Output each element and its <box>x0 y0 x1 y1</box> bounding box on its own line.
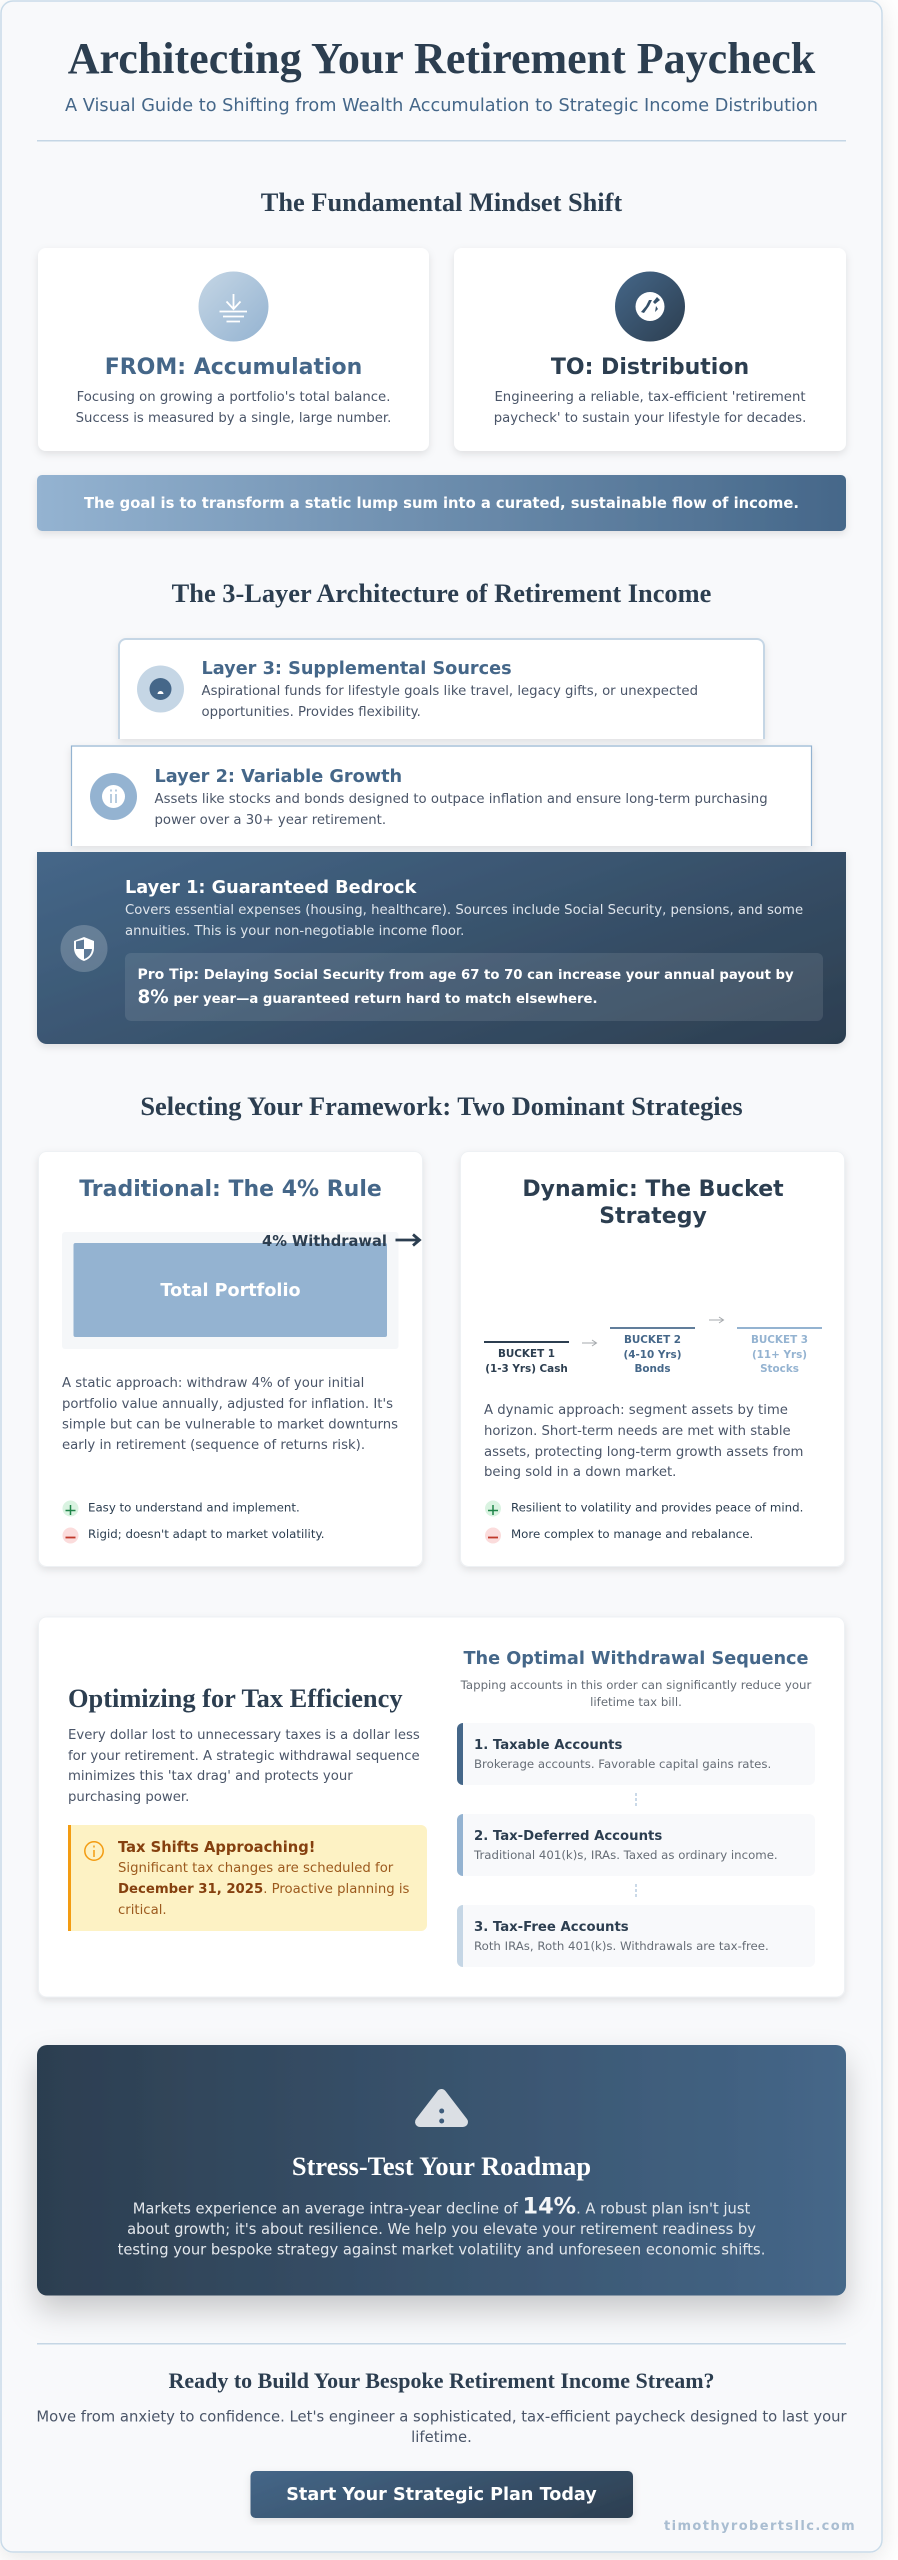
chart: total portfolio <box>62 1232 420 1349</box>
callout: tax shifts: Significant tax changes are scheduled for <box>118 1861 394 1876</box>
watermark: timothyrobertsllc.com <box>664 2519 856 2534</box>
description <box>202 684 698 720</box>
description: Assets like stocks and bonds designed to outpace inflation and ensure long-term purchasing <box>154 792 768 807</box>
heading <box>522 1177 784 1229</box>
sequence intro: Tapping accounts in this order can significantly reduce your <box>460 1678 811 1692</box>
step 1: 1. Taxable Accounts <box>474 1738 623 1753</box>
title: Architecting Your Retirement Paycheck <box>68 34 816 83</box>
step 2: 2. Tax-Deferred Accounts <box>474 1829 662 1844</box>
step 1: Brokerage accounts. Favorable capital gains rates. <box>474 1757 771 1771</box>
description: Every dollar lost to unnecessary taxes is a dollar less <box>68 1728 420 1743</box>
withdrawal label: 4% Withdrawal <box>262 1233 387 1250</box>
bucket 2: (4-10 Yrs) <box>624 1349 681 1361</box>
step 2 <box>457 1814 815 1876</box>
goal banner: The goal is to transform a static lump sum into a curated, sustainable flow of income. <box>84 495 799 512</box>
button <box>250 2471 633 2518</box>
subtitle: A Visual Guide to Shifting from Wealth Accumulation to Strategic Income Distribution <box>65 96 818 116</box>
bucket 2: BUCKET 2 <box>624 1334 681 1346</box>
bucket 2 <box>610 1327 695 1375</box>
panel: layer 1 <box>37 852 846 1044</box>
heading: Layer 2: Variable Growth <box>154 767 402 787</box>
step 2: Traditional 401(k)s, IRAs. Taxed as ordinary income. <box>473 1848 778 1862</box>
description: early in retirement (sequence of returns risk). <box>62 1438 365 1453</box>
heading: Dynamic: The Bucket <box>522 1177 784 1202</box>
pro item: Resilient to volatility and provides peace of mind. <box>511 1500 803 1514</box>
header <box>65 34 818 116</box>
description: assets, protecting long-term growth assets from <box>484 1445 803 1460</box>
description <box>76 390 391 426</box>
bucket 1 <box>484 1341 569 1375</box>
panel: traditional 4% rule <box>38 1152 422 1566</box>
description <box>484 1403 803 1480</box>
description: about growth; it's about resilience. We help you elevate your retirement readiness by <box>127 2221 756 2238</box>
description: A static approach: withdraw 4% of your initial <box>62 1376 364 1391</box>
chart: buckets <box>484 1317 822 1375</box>
panel: tax efficiency <box>38 1617 844 1997</box>
step 3 <box>457 1905 815 1967</box>
description: for your retirement. A strategic withdrawal sequence <box>68 1749 420 1764</box>
step 3: 3. Tax-Free Accounts <box>474 1920 629 1935</box>
description: being sold in a down market. <box>484 1465 676 1480</box>
icon: info <box>85 1842 103 1860</box>
description: Aspirational funds for lifestyle goals like travel, legacy gifts, or unexpected <box>202 684 698 699</box>
panel: from accumulation <box>38 248 429 451</box>
chart: total portfolio: Total Portfolio <box>160 1281 301 1301</box>
bucket 3: (11+ Yrs) <box>752 1349 807 1361</box>
heading: withdrawal sequence: The Optimal Withdrawal Sequence <box>463 1649 809 1669</box>
section heading: mindset shift: The Fundamental Mindset Shift <box>261 187 622 217</box>
section heading: architecture: The 3-Layer Architecture of Retirement Income <box>172 578 712 608</box>
description <box>62 1376 398 1453</box>
description <box>494 390 806 426</box>
description: lifetime. <box>411 2429 472 2446</box>
description <box>118 2194 765 2258</box>
section heading: strategies: Selecting Your Framework: Two Dominant Strategies <box>140 1091 743 1121</box>
pro item: Easy to understand and implement. <box>88 1500 300 1514</box>
description: opportunities. Provides flexibility. <box>202 705 421 720</box>
icon: distribution wrench <box>615 272 685 342</box>
description: horizon. Short-term needs are met with stable <box>484 1424 791 1439</box>
bucket 2: Bonds <box>634 1363 671 1375</box>
callout: tax shifts: critical. <box>118 1903 167 1918</box>
heading: Layer 1: Guaranteed Bedrock <box>125 878 418 898</box>
heading: Stress-Test Your Roadmap <box>292 2151 591 2181</box>
bucket 1: BUCKET 1 <box>498 1348 555 1360</box>
panel: stress test <box>37 2045 846 2296</box>
description: Engineering a reliable, tax-efficient 'retirement <box>494 390 806 405</box>
heading: Optimizing for Tax Efficiency <box>68 1683 403 1713</box>
description <box>68 1728 420 1805</box>
callout: tax shifts: December 31, 2025. Proactive planning is <box>118 1882 410 1897</box>
panel: layer 2 <box>71 745 812 846</box>
bucket 3 <box>737 1327 822 1375</box>
description: paycheck' to sustain your lifestyle for decades. <box>494 411 806 426</box>
heading: FROM: Accumulation <box>105 355 362 380</box>
heading: Traditional: The 4% Rule <box>79 1177 382 1202</box>
description: A dynamic approach: segment assets by time <box>484 1403 788 1418</box>
heading: TO: Distribution <box>551 355 749 380</box>
step 1 <box>457 1723 815 1785</box>
description: annuities. This is your non-negotiable income floor. <box>125 924 464 939</box>
icon: layer 2 <box>90 773 137 820</box>
description: Success is measured by a single, large number. <box>76 411 391 426</box>
description: portfolio value annually, adjusted for inflation. It's <box>62 1397 393 1412</box>
panel: layer 3 <box>118 638 765 739</box>
icon: shield <box>60 925 108 972</box>
icon: warning triangle <box>420 2094 463 2124</box>
description: testing your bespoke strategy against market volatility and unforeseen economic shifts. <box>118 2242 765 2258</box>
description <box>154 792 768 828</box>
goal banner <box>37 475 846 531</box>
description: Focusing on growing a portfolio's total balance. <box>77 390 390 405</box>
description: power over a 30+ year retirement. <box>154 813 386 828</box>
bucket 3: BUCKET 3 <box>751 1334 808 1346</box>
pro tip box: Pro Tip: Delaying Social Security from age 67 to 70 can increase your annual payout by <box>138 967 794 983</box>
panel: to distribution <box>454 248 846 451</box>
step 3: Roth IRAs, Roth 401(k)s. Withdrawals are tax-free. <box>474 1939 769 1953</box>
heading: Ready to Build Your Bespoke Retirement Income Stream? <box>168 2368 715 2393</box>
icon: layer 3 <box>137 666 184 712</box>
description <box>36 2408 848 2446</box>
con item: Rigid; doesn't adapt to market volatility. <box>88 1527 325 1541</box>
description: minimizes this 'tax drag' and protects your <box>68 1769 353 1784</box>
button: Start Your Strategic Plan Today <box>286 2485 597 2505</box>
call to action <box>36 2368 848 2518</box>
pro tip box: 8% per year—a guaranteed return hard to match elsewhere. <box>138 987 598 1008</box>
description: Markets experience an average intra-year decline of 14%. A robust plan isn't just <box>133 2194 750 2220</box>
arrow <box>396 1234 420 1246</box>
con item: More complex to manage and rebalance. <box>511 1527 753 1541</box>
heading: Strategy <box>599 1204 707 1229</box>
description: Move from anxiety to confidence. Let's engineer a sophisticated, tax-efficient paycheck designed to last your <box>36 2408 848 2426</box>
panel: dynamic bucket strategy <box>460 1152 844 1566</box>
description: purchasing power. <box>68 1790 189 1805</box>
description: Covers essential expenses (housing, healthcare). Sources include Social Security, pensions, and some <box>125 903 803 918</box>
arrow <box>709 1317 724 1323</box>
arrow <box>582 1340 596 1346</box>
icon: accumulation arrow <box>198 272 268 342</box>
description <box>125 903 803 939</box>
sequence intro <box>460 1678 811 1709</box>
pro tip box <box>125 953 823 1021</box>
description: simple but can be vulnerable to market downturns <box>62 1418 398 1432</box>
sequence intro: lifetime tax bill. <box>590 1695 682 1709</box>
bucket 1: (1-3 Yrs) Cash <box>485 1363 568 1375</box>
bucket 3: Stocks <box>760 1363 799 1375</box>
callout: tax shifts: Tax Shifts Approaching! <box>118 1839 315 1856</box>
heading: Layer 3: Supplemental Sources <box>202 659 512 679</box>
callout: tax shifts <box>68 1825 427 1931</box>
